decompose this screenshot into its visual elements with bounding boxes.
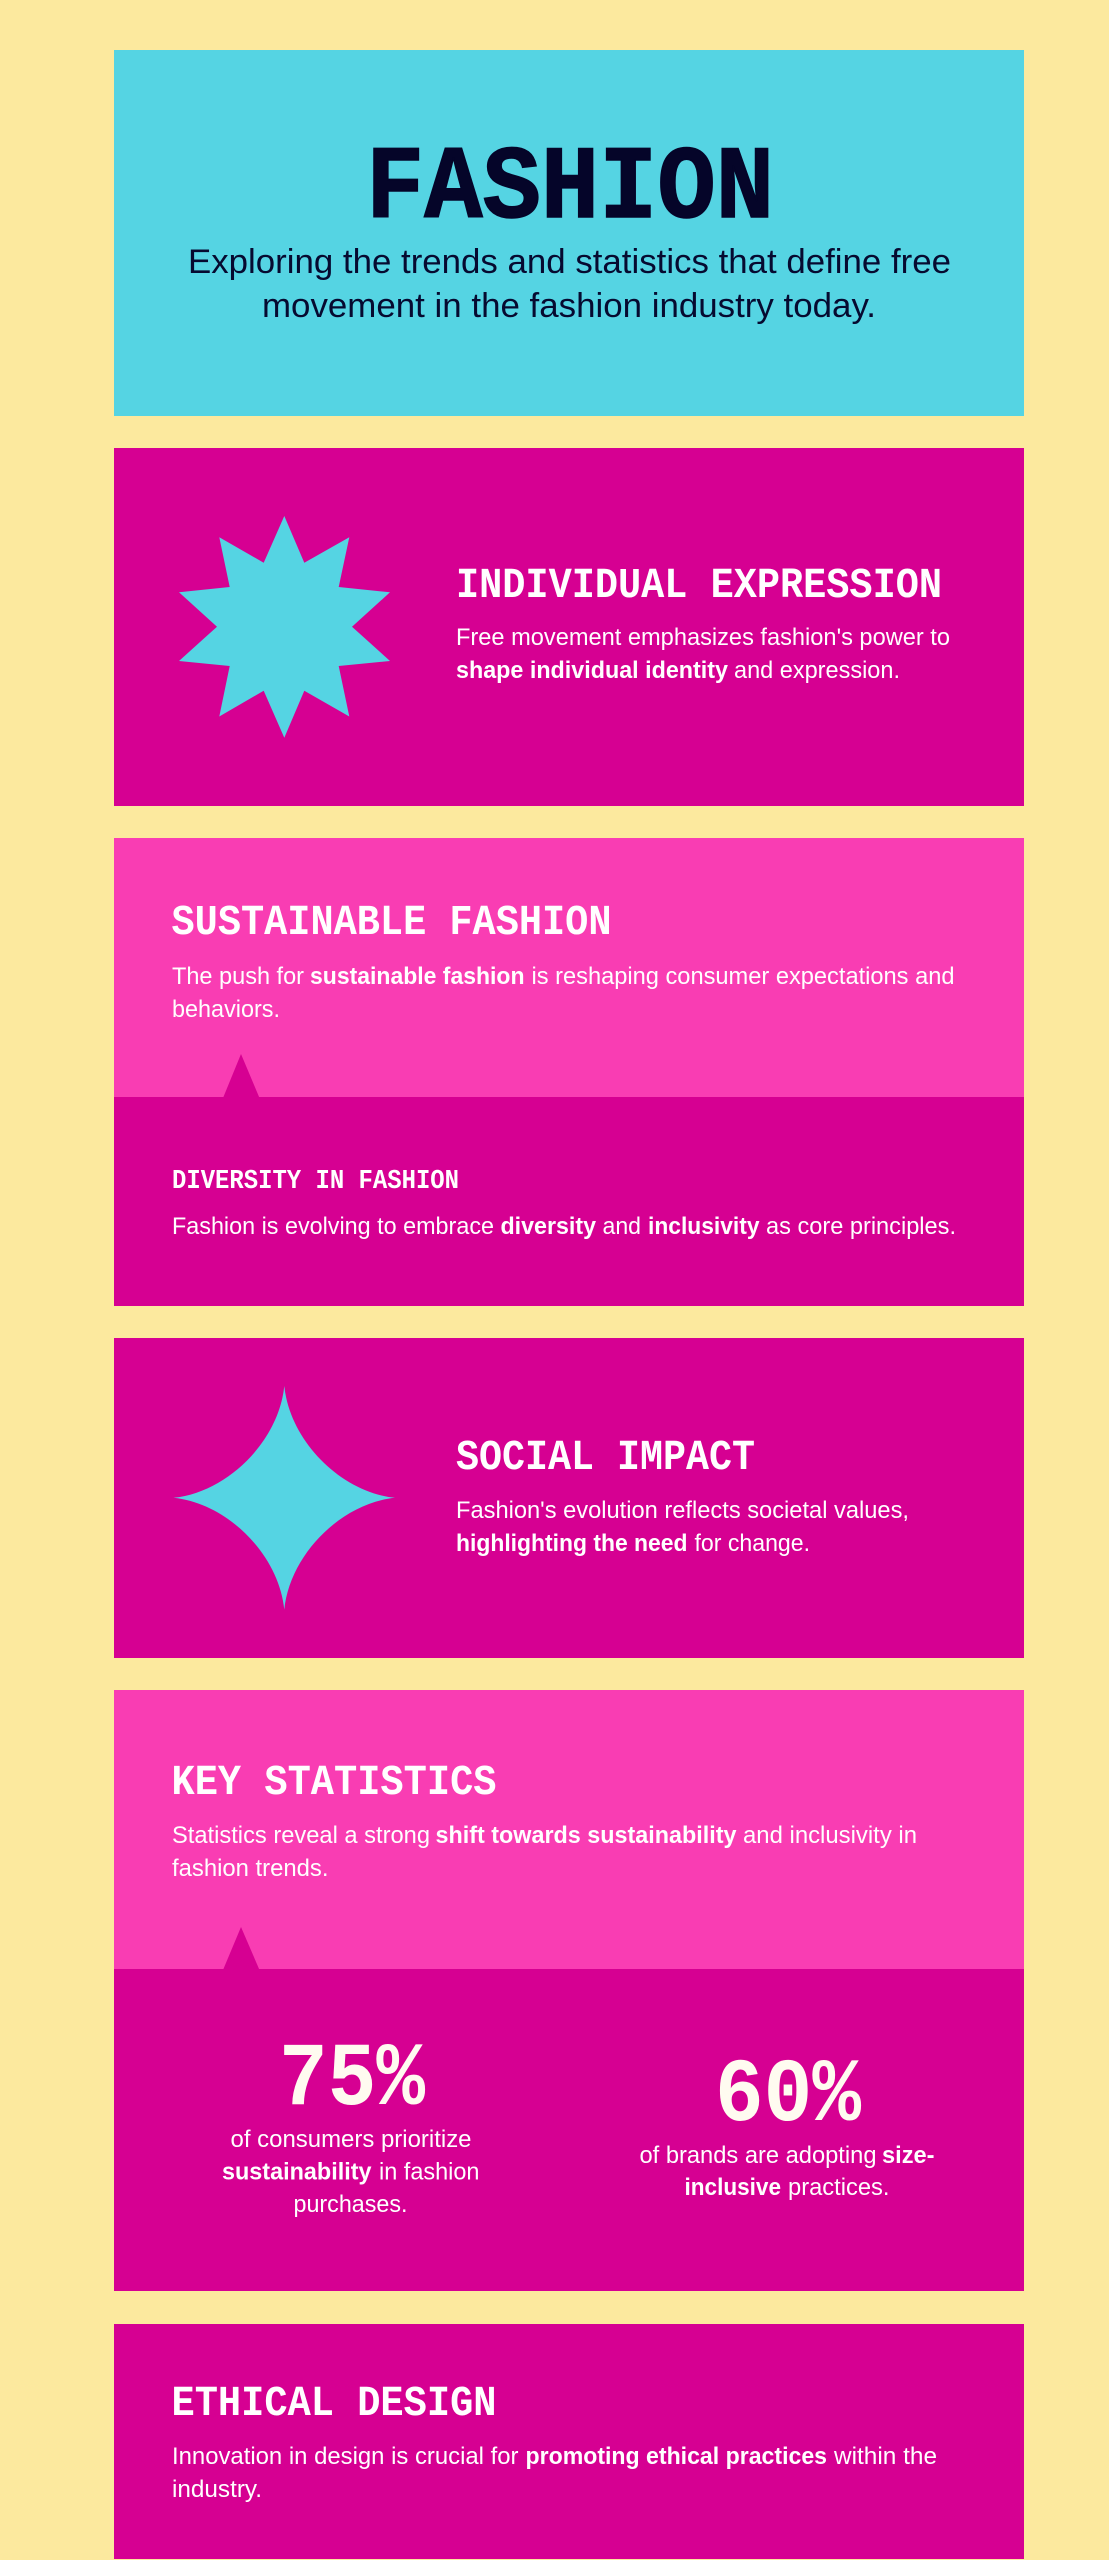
text: ethical design: within the	[833, 2443, 937, 2470]
panel: statistics	[114, 1927, 1024, 2291]
subtitle: movement in the fashion industry today.	[262, 287, 876, 325]
text: social impact: Fashion's evolution reflects societal values,	[456, 1497, 909, 1524]
subtitle: Exploring the trends and statistics that define free	[188, 243, 951, 281]
text: social impact	[456, 1497, 909, 1557]
text: key statistics: fashion trends.	[172, 1855, 328, 1882]
stat text: 75%: purchases.	[294, 2191, 408, 2218]
text: diversity in fashion: and	[602, 1213, 641, 1240]
text: social impact: highlighting the need	[456, 1530, 688, 1557]
panel: key statistics intro	[114, 1690, 1024, 1969]
text: diversity in fashion: inclusivity	[648, 1213, 760, 1240]
panel: sustainable fashion	[114, 838, 1024, 1097]
heading: social impact: SOCIAL IMPACT	[456, 1433, 755, 1482]
stat: 75%: 75%	[279, 2030, 426, 2132]
heading: individual expression: INDIVIDUAL EXPRESSION	[456, 561, 942, 610]
stat text: 60%: practices.	[788, 2174, 890, 2201]
panel: header	[114, 50, 1024, 416]
text: ethical design: promoting ethical practices	[526, 2443, 827, 2470]
stat text: 60%: size-	[882, 2142, 935, 2169]
text: individual expression: and expression.	[734, 657, 900, 684]
title: FASHION	[366, 131, 774, 249]
text: diversity in fashion: as core principles.	[766, 1213, 956, 1240]
stat text: 75%: sustainability	[222, 2158, 372, 2186]
heading: sustainable fashion: SUSTAINABLE FASHION	[172, 898, 612, 947]
text: ethical design	[172, 2443, 937, 2503]
stat: 60%	[640, 2046, 935, 2201]
text: diversity in fashion: diversity	[500, 1213, 597, 1240]
pointer arrow	[223, 1927, 260, 1970]
text: individual expression: Free movement emphasizes fashion's power to	[456, 624, 950, 651]
text: ethical design: Innovation in design is crucial for	[172, 2443, 519, 2470]
text: sustainable fashion: sustainable fashion	[310, 963, 524, 990]
icon: ten-point star	[179, 516, 390, 738]
text: key statistics: and inclusivity in	[743, 1822, 917, 1849]
heading: ethical design: ETHICAL DESIGN	[172, 2379, 496, 2428]
stat text: 75%	[222, 2126, 480, 2218]
text: sustainable fashion: is reshaping consumer expectations and	[532, 963, 954, 990]
panel: social impact	[114, 1338, 1024, 1658]
icon: four-point star	[174, 1386, 395, 1610]
text: sustainable fashion: The push for	[172, 963, 304, 990]
text: key statistics: shift towards sustainability	[436, 1822, 737, 1849]
panel: individual expression	[114, 448, 1024, 806]
text: key statistics	[172, 1822, 917, 1882]
heading: diversity in fashion: DIVERSITY IN FASHION	[172, 1166, 459, 1196]
text: sustainable fashion	[172, 963, 954, 1023]
stat text: 60%: inclusive	[684, 2174, 781, 2201]
panel: ethical design	[114, 2324, 1024, 2559]
subtitle	[188, 243, 951, 325]
text: diversity in fashion	[172, 1213, 956, 1240]
text: individual expression: shape individual identity	[456, 657, 729, 684]
stat text: 60%: of brands are adopting	[640, 2142, 876, 2169]
text: sustainable fashion: behaviors.	[172, 996, 280, 1023]
stat: 60%: 60%	[715, 2046, 862, 2148]
text: social impact: for change.	[694, 1530, 810, 1557]
text: key statistics: Statistics reveal a strong	[172, 1822, 430, 1849]
stat text: 60%	[640, 2142, 935, 2201]
text: ethical design: industry.	[172, 2476, 262, 2503]
stat: 75%	[222, 2030, 480, 2218]
stat text: 75%: in fashion	[379, 2158, 480, 2186]
text: individual expression	[456, 624, 950, 684]
pointer arrow	[223, 1054, 260, 1098]
heading: key statistics: KEY STATISTICS	[172, 1758, 496, 1807]
stat text: 75%: of consumers prioritize	[230, 2126, 472, 2153]
panel: diversity in fashion	[114, 1054, 1024, 1306]
text: diversity in fashion: Fashion is evolving to embrace	[172, 1213, 494, 1240]
